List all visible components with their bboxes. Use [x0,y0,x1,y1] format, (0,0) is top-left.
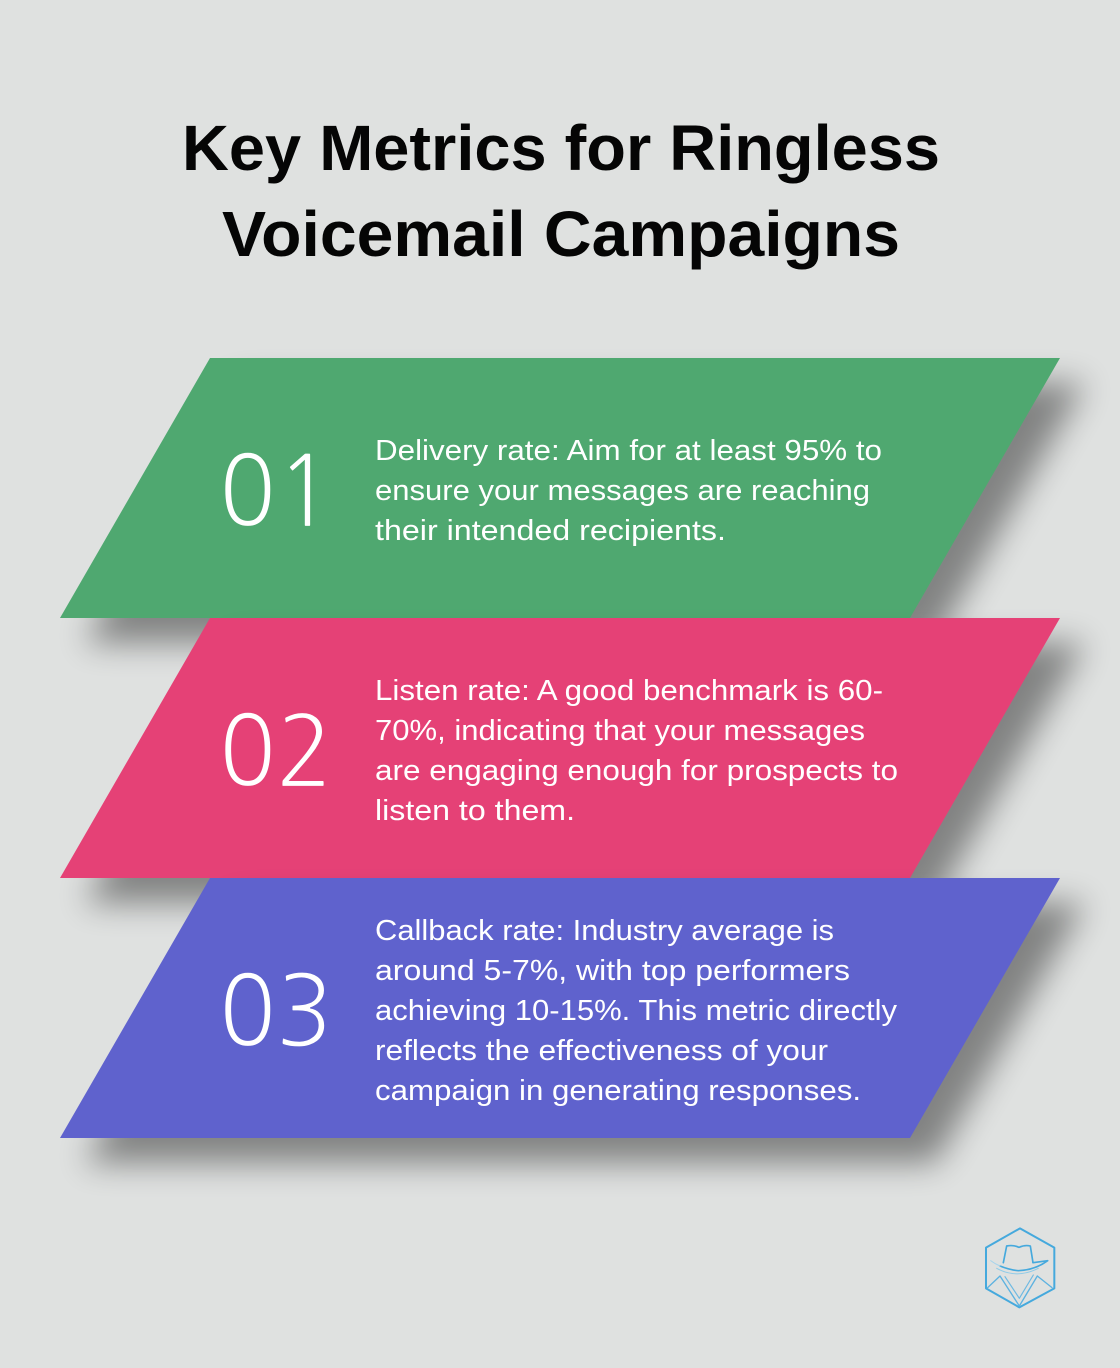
listen rate text: 70%, indicating that your messages [375,715,865,747]
callback rate text: achieving 10-15%. This metric directly [375,995,898,1027]
pink parallelogram [60,618,1060,878]
icon: spy logo [986,1228,1054,1307]
number 01: 01 [219,443,333,541]
callback rate text [375,915,898,1107]
callback rate text: Callback rate: Industry average is [375,915,834,947]
number 03: 03 [219,963,333,1061]
listen rate text: Listen rate: A good benchmark is 60- [375,675,883,707]
panel: listen rate [60,618,1060,878]
callback rate text: around 5-7%, with top performers [375,955,850,987]
listen rate text: listen to them. [375,795,575,827]
green parallelogram [60,358,1060,618]
delivery rate text: their intended recipients. [375,515,726,547]
number 02: 02 [219,703,333,801]
panel: callback rate [60,878,1060,1138]
title [182,112,940,270]
delivery rate text [375,435,882,547]
panel: delivery rate [60,358,1060,618]
callback rate text: reflects the effectiveness of your [375,1035,828,1067]
title: Voicemail Campaigns [222,198,900,270]
delivery rate text: Delivery rate: Aim for at least 95% to [375,435,882,467]
listen rate text [375,675,898,827]
callback rate text: campaign in generating responses. [375,1075,861,1107]
blue parallelogram [60,878,1060,1138]
title: Key Metrics for Ringless [182,112,940,184]
delivery rate text: ensure your messages are reaching [375,475,870,507]
listen rate text: are engaging enough for prospects to [375,755,898,787]
